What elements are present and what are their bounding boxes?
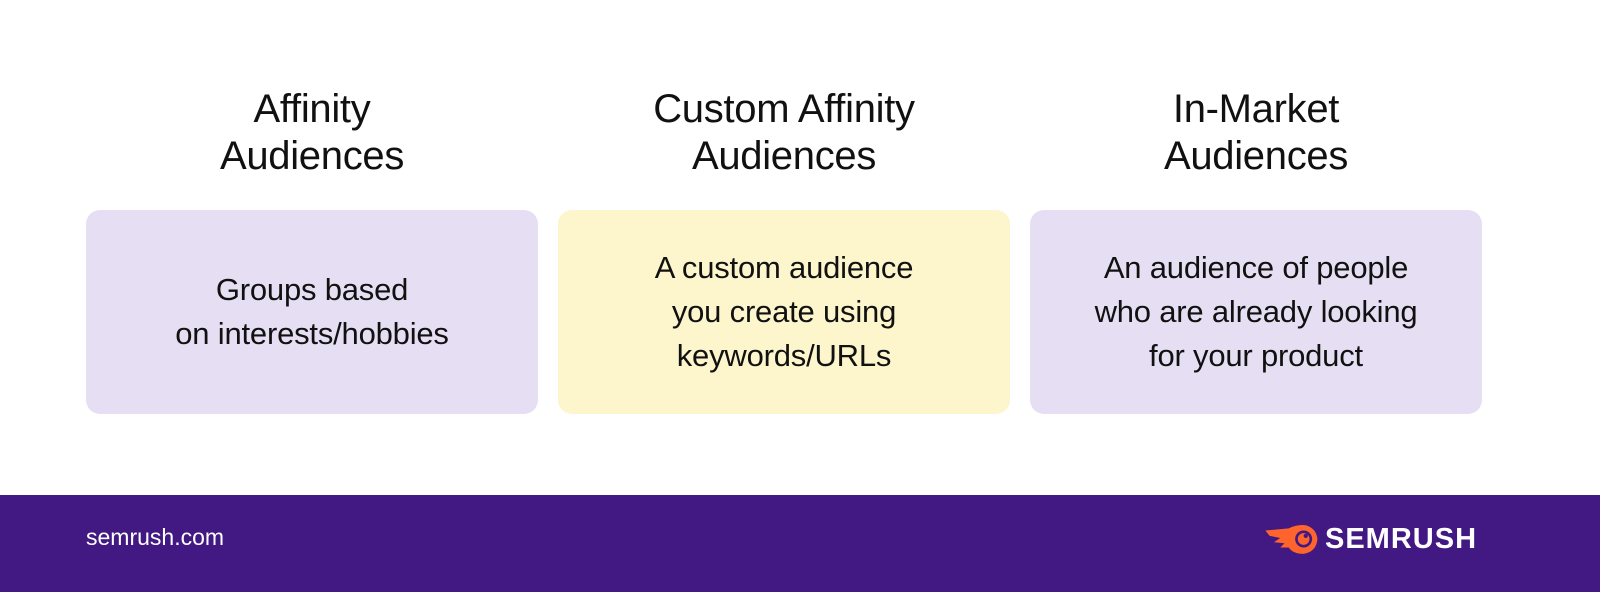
logo: [1266, 523, 1477, 555]
heading: in-market: In-Market: [1173, 87, 1339, 131]
footer text: semrush.com: [86, 524, 224, 550]
logo text: SEMRUSH: [1325, 523, 1477, 555]
heading: affinity: Affinity: [254, 87, 370, 131]
panel: custom affinity: you create using: [672, 294, 896, 329]
panel: in-market: for your product: [1149, 338, 1363, 373]
icon: semrush flame: [1266, 525, 1318, 554]
heading: custom affinity: [653, 87, 915, 178]
heading: in-market: Audiences: [1164, 134, 1348, 178]
panel: affinity: [86, 210, 538, 414]
heading: custom affinity: Custom Affinity: [653, 87, 915, 131]
panel: custom affinity: keywords/URLs: [677, 338, 891, 373]
panel: in-market: An audience of people: [1104, 250, 1408, 285]
panel: in-market: who are already looking: [1095, 294, 1417, 329]
heading: affinity: Audiences: [220, 134, 404, 178]
panel: in-market: [1030, 210, 1482, 414]
footer: [0, 495, 1600, 592]
heading: affinity: [220, 87, 404, 178]
panel: custom affinity: A custom audience: [655, 250, 913, 285]
panel: affinity: Groups based: [216, 272, 408, 307]
heading: in-market: [1164, 87, 1348, 178]
panel: custom affinity: [558, 210, 1010, 414]
heading: custom affinity: Audiences: [692, 134, 876, 178]
panel: affinity: on interests/hobbies: [175, 316, 449, 351]
